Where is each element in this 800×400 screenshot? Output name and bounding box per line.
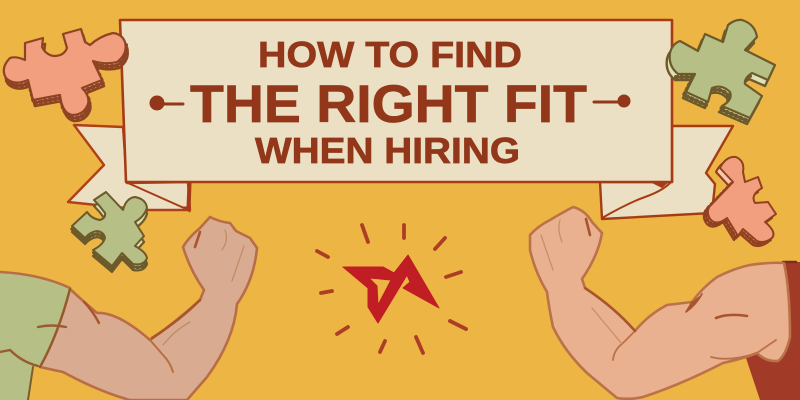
left forearm and fist xyxy=(40,217,257,400)
puzzle piece: pink lower-right xyxy=(704,157,776,246)
logo burst rays xyxy=(317,225,466,353)
left flexed arm xyxy=(0,217,257,400)
banner xyxy=(120,20,672,182)
left ribbon tail xyxy=(68,125,191,212)
puzzle piece: pink top-left xyxy=(4,29,128,121)
title line: how to find: HOW TO FIND xyxy=(258,34,522,75)
logo mark xyxy=(343,255,439,323)
title line: the right fit: THE RIGHT FIT xyxy=(190,75,587,134)
left pin decoration xyxy=(150,96,183,110)
red tank top xyxy=(746,262,800,400)
puzzle piece: green top-right xyxy=(667,20,775,124)
right pin decoration xyxy=(594,94,630,108)
title line: when hiring: WHEN HIRING xyxy=(255,130,520,171)
green sleeve xyxy=(0,272,70,400)
puzzle piece: green lower-left xyxy=(72,192,147,272)
right ribbon tail xyxy=(600,126,733,219)
right forearm and fist xyxy=(530,207,790,399)
right flexed arm xyxy=(530,207,800,400)
